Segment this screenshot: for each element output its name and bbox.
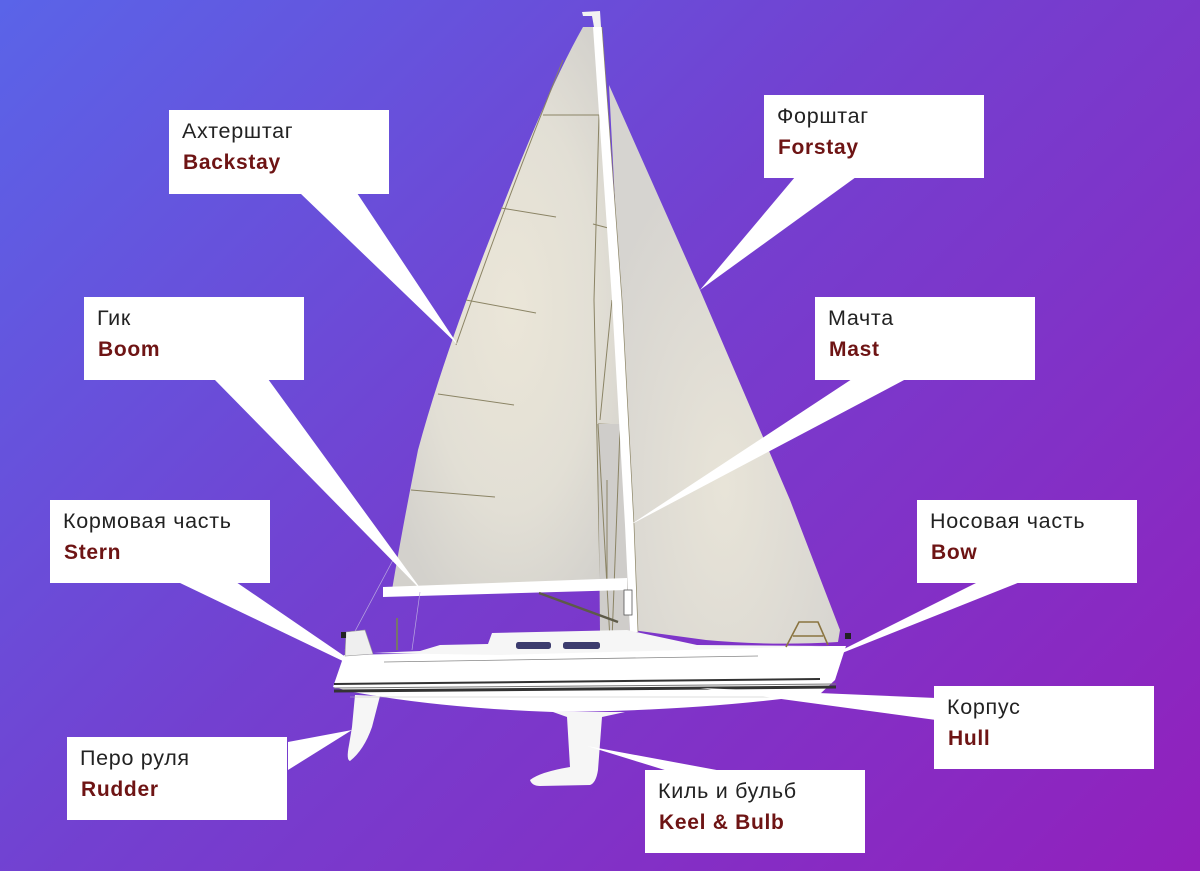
sail details: battens and rigging bbox=[411, 60, 623, 578]
pointer: forstay bbox=[700, 177, 856, 290]
label: Boom: Boom bbox=[98, 338, 160, 361]
label: Hull: Корпус bbox=[947, 695, 1021, 719]
pointer: hull bbox=[700, 688, 936, 720]
boom vang bbox=[539, 593, 618, 622]
label: Hull: Hull bbox=[948, 727, 990, 750]
label: Mast: Мачта bbox=[828, 306, 894, 330]
label: Boom: Гик bbox=[97, 306, 131, 330]
keel and bulb bbox=[530, 712, 625, 786]
pointer: mast bbox=[630, 379, 906, 525]
label: Stern bbox=[50, 500, 270, 583]
label: Mast: Mast bbox=[829, 338, 880, 361]
pointer: boom bbox=[214, 379, 423, 592]
label: Backstay: Backstay bbox=[183, 151, 281, 174]
stern pulpit bbox=[345, 630, 373, 656]
jib sail bbox=[609, 85, 840, 644]
label: Rudder: Rudder bbox=[81, 778, 159, 801]
label: Forstay: Forstay bbox=[778, 136, 859, 159]
rudder bbox=[348, 695, 380, 761]
label: Bow: Bow bbox=[931, 541, 977, 564]
label: Backstay bbox=[169, 110, 389, 194]
label: Forstay: Форштаг bbox=[777, 104, 869, 128]
label: Rudder bbox=[67, 737, 287, 820]
hull bbox=[333, 646, 846, 712]
label: Bow bbox=[917, 500, 1137, 583]
label: Hull bbox=[934, 686, 1154, 769]
label: Keel and Bulb: Киль и бульб bbox=[658, 779, 797, 803]
lower mast gray panel bbox=[598, 424, 630, 632]
hull stripes bbox=[334, 656, 836, 697]
cabin windows bbox=[516, 642, 551, 649]
pointer: backstay bbox=[300, 193, 458, 345]
pointer: keel bbox=[587, 746, 722, 771]
label: Keel and Bulb: Keel & Bulb bbox=[659, 811, 785, 834]
label: Bow: Носовая часть bbox=[930, 509, 1085, 533]
label: Boom bbox=[84, 297, 304, 380]
label: Stern: Stern bbox=[64, 541, 121, 564]
main sail bbox=[392, 27, 630, 590]
pointer: bow bbox=[812, 582, 1020, 665]
bow pulpit bbox=[786, 622, 828, 647]
label: Rudder: Перо руля bbox=[80, 746, 190, 770]
pointer: rudder bbox=[288, 730, 352, 770]
boom bbox=[383, 578, 627, 597]
label: Stern: Кормовая часть bbox=[63, 509, 232, 533]
deck and cabin bbox=[373, 630, 830, 655]
backstay lines bbox=[345, 560, 420, 650]
mast bbox=[593, 27, 638, 632]
label: Forstay bbox=[764, 95, 984, 178]
label: Backstay: Ахтерштаг bbox=[182, 119, 293, 143]
label: Mast bbox=[815, 297, 1035, 380]
label: Keel and Bulb bbox=[645, 770, 865, 853]
pointer: stern bbox=[178, 582, 372, 675]
